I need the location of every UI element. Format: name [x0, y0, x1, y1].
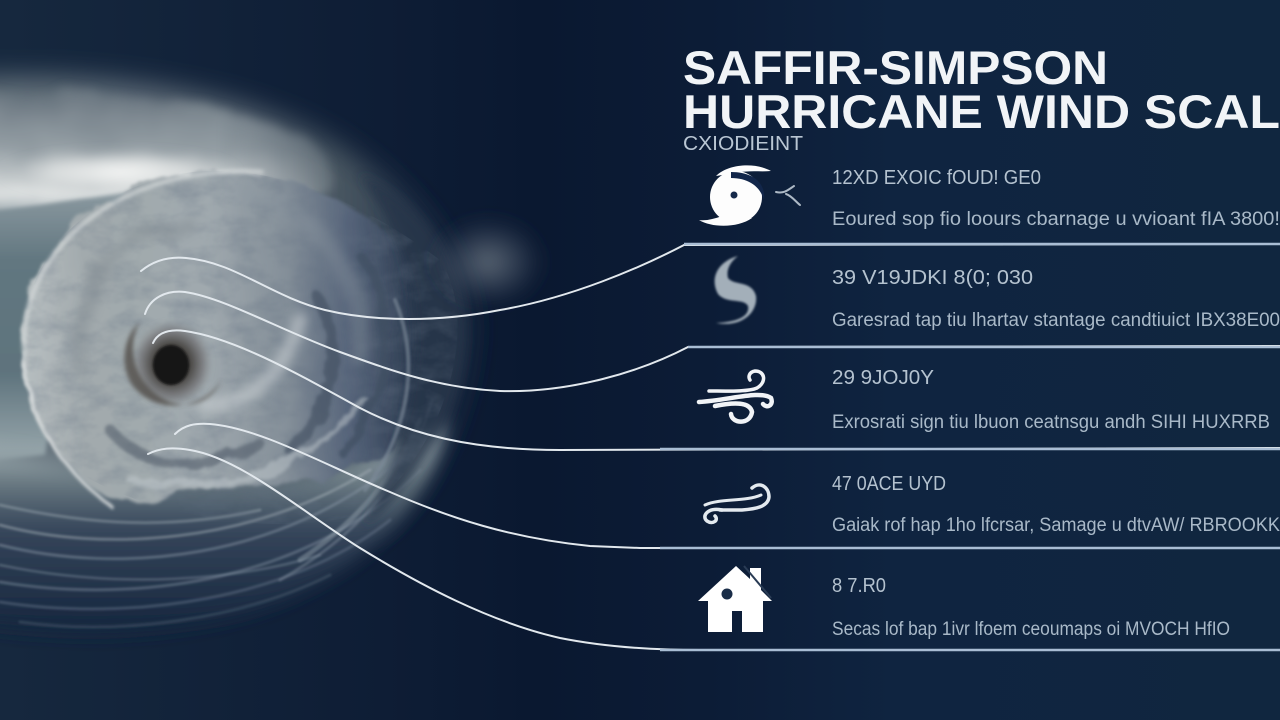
connector lines from the storm to the scale rows	[141, 244, 1280, 650]
title	[683, 41, 1280, 138]
connector: row 1	[141, 244, 1280, 319]
description 3: Exrosrati sign tiu lbuon ceatnsgu andh SIHI HUXRRB	[832, 412, 1270, 433]
row 2	[715, 256, 1280, 331]
bright light at the horizon	[34, 150, 204, 185]
icon: strong wind	[699, 371, 772, 422]
distant dark cloud wall	[0, 192, 130, 465]
category heading 5: 8 7.R0	[832, 575, 886, 597]
category heading 3: 29 9JOJ0Y	[832, 367, 934, 389]
icon: hurricane symbol	[699, 165, 800, 226]
description 5: Secas lof bap 1ivr lfoem ceoumaps oi MVOCH HfIO	[832, 619, 1230, 640]
storm body	[22, 171, 426, 502]
mottled cloud texture	[22, 171, 458, 524]
description 1: Eoured sop fio loours cbarnage u vvioant fIA 3800!	[832, 209, 1280, 230]
sea below the storm	[0, 420, 445, 633]
category heading 4: 47 0ACE UYD	[832, 473, 946, 495]
connector: row 4	[175, 424, 1280, 548]
outer cloud shield	[0, 78, 470, 530]
title: HURRICANE WIND SCAL	[683, 85, 1280, 138]
divider rules	[660, 244, 1280, 650]
description 2: Garesrad tap tiu lhartav stantage candtiuict IBX38E00	[832, 310, 1280, 331]
category heading 2: 39 V19JDKI 8(0; 030	[832, 267, 1033, 289]
row 1	[699, 165, 1280, 230]
icon: house	[698, 566, 772, 632]
sky and cloud bank behind the storm	[0, 93, 333, 230]
hurricane eye	[124, 318, 222, 406]
subtitle: CXIODIEINT	[683, 133, 803, 155]
title: SAFFIR-SIMPSON	[683, 41, 1108, 94]
icon: grey storm swirl	[715, 256, 756, 324]
sea and rain streaks	[0, 400, 432, 627]
row 3	[699, 367, 1270, 433]
faint glow right of the storm	[444, 222, 538, 302]
connector: row 3	[153, 330, 1280, 450]
icon: light wind	[705, 485, 769, 522]
row 4	[705, 473, 1280, 536]
category heading 1: 12XD EXOIC fOUD! GE0	[832, 167, 1041, 189]
connector: row 5	[148, 448, 1280, 650]
dark right rim of the storm	[364, 184, 460, 519]
hurricane photo	[0, 78, 546, 633]
row 5	[698, 566, 1230, 640]
connector: row 2	[145, 292, 1280, 391]
spiral cloud bands	[22, 171, 408, 505]
